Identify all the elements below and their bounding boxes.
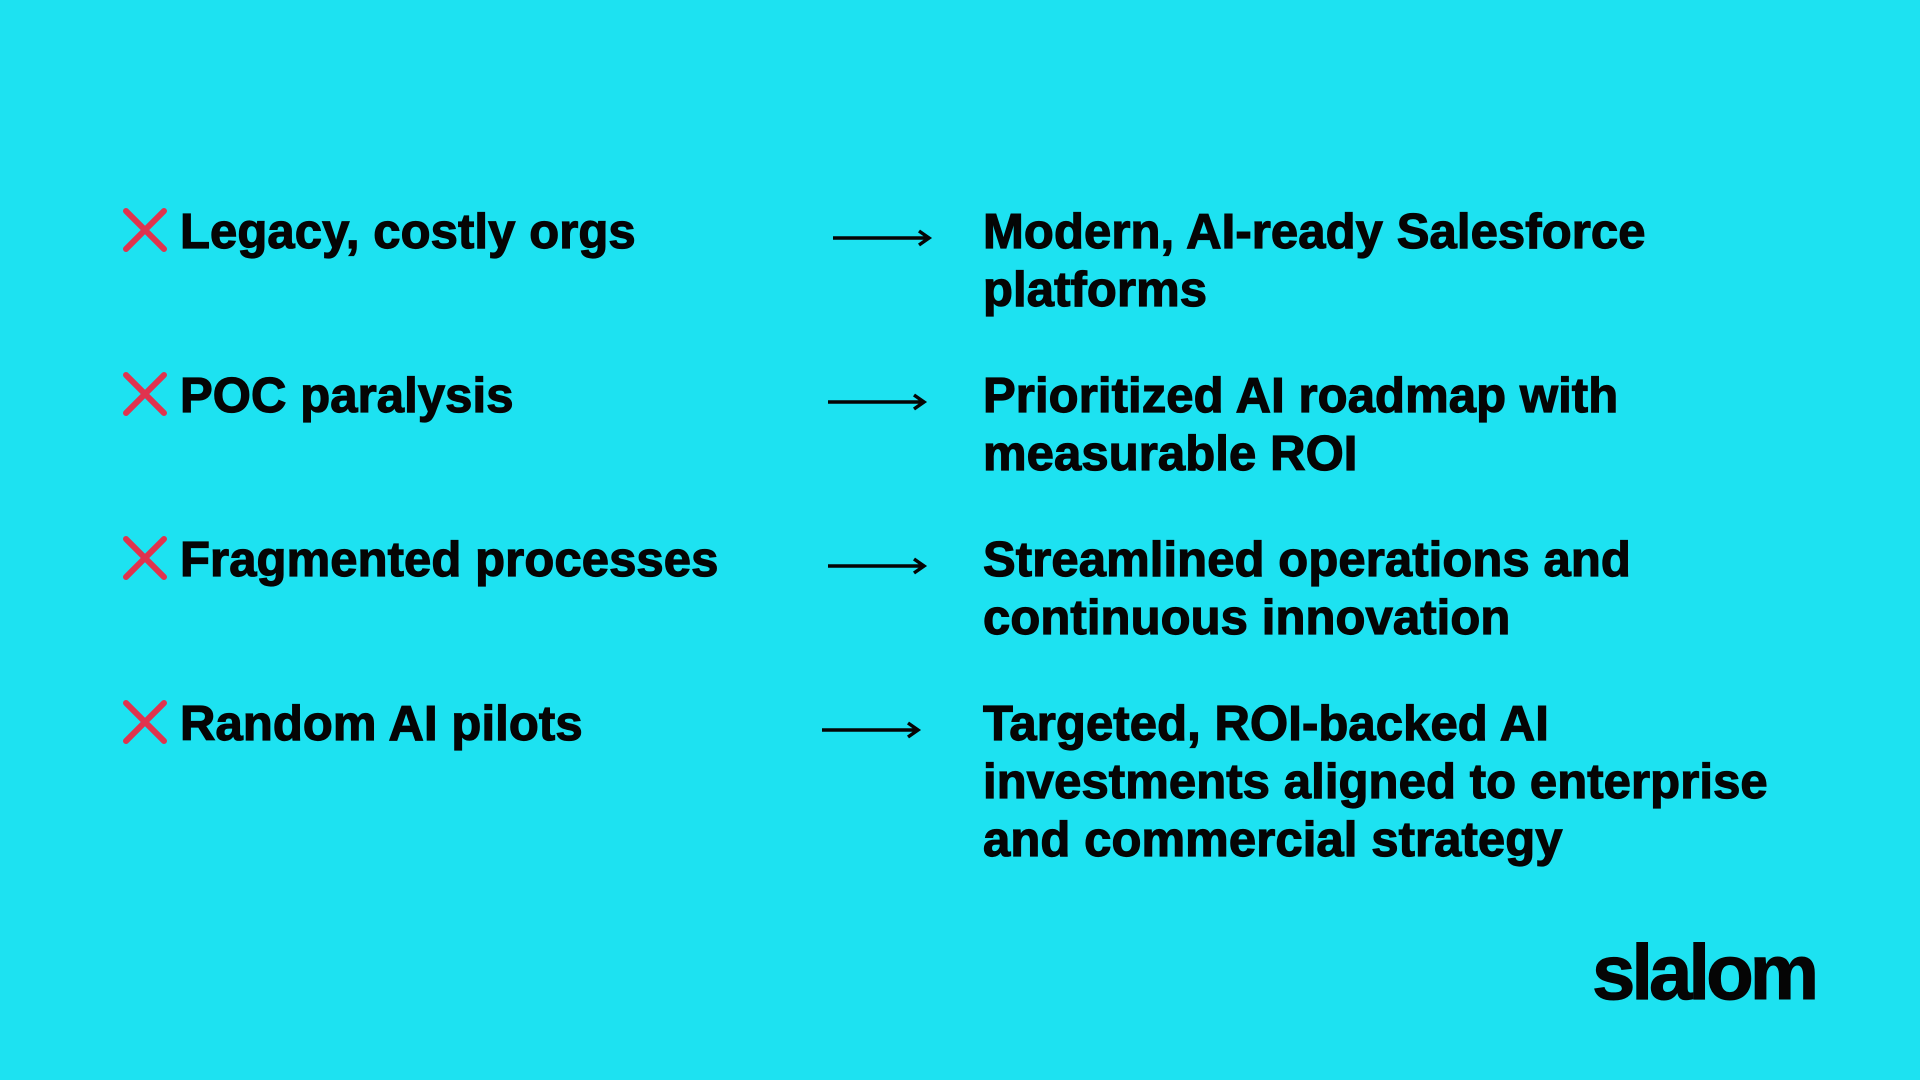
arrow: [822, 722, 921, 738]
left text: Legacy, costly orgs: [180, 205, 636, 259]
arrow: [828, 558, 927, 574]
row 1: [123, 205, 1646, 317]
right text: [983, 205, 1646, 317]
left text: POC paralysis: [180, 369, 514, 423]
left text: Random AI pilots: [180, 697, 583, 751]
right text: measurable ROI: [983, 427, 1358, 481]
left text: Fragmented processes: [180, 533, 718, 587]
right text: platforms: [983, 263, 1207, 317]
right text: and commercial strategy: [983, 813, 1563, 867]
arrow: [833, 230, 932, 246]
right text: continuous innovation: [983, 591, 1510, 645]
right text: Streamlined operations and: [983, 533, 1631, 587]
right text: Prioritized AI roadmap with: [983, 369, 1618, 423]
arrow: [828, 394, 927, 410]
right text: [982, 697, 1768, 867]
icon: red x: [123, 700, 167, 744]
right text: Modern, AI-ready Salesforce: [983, 205, 1646, 259]
right text: Targeted, ROI-backed AI: [983, 697, 1549, 751]
row 3: [123, 533, 1631, 645]
icon: red x: [123, 372, 167, 416]
logo: slalom: slalom: [1592, 928, 1815, 1016]
icon: red x: [123, 208, 167, 252]
right text: [983, 369, 1618, 481]
right text: [983, 533, 1631, 645]
right text: investments aligned to enterprise: [983, 755, 1768, 809]
row 4: [123, 697, 1768, 867]
row 2: [123, 369, 1618, 481]
icon: red x: [123, 536, 167, 580]
